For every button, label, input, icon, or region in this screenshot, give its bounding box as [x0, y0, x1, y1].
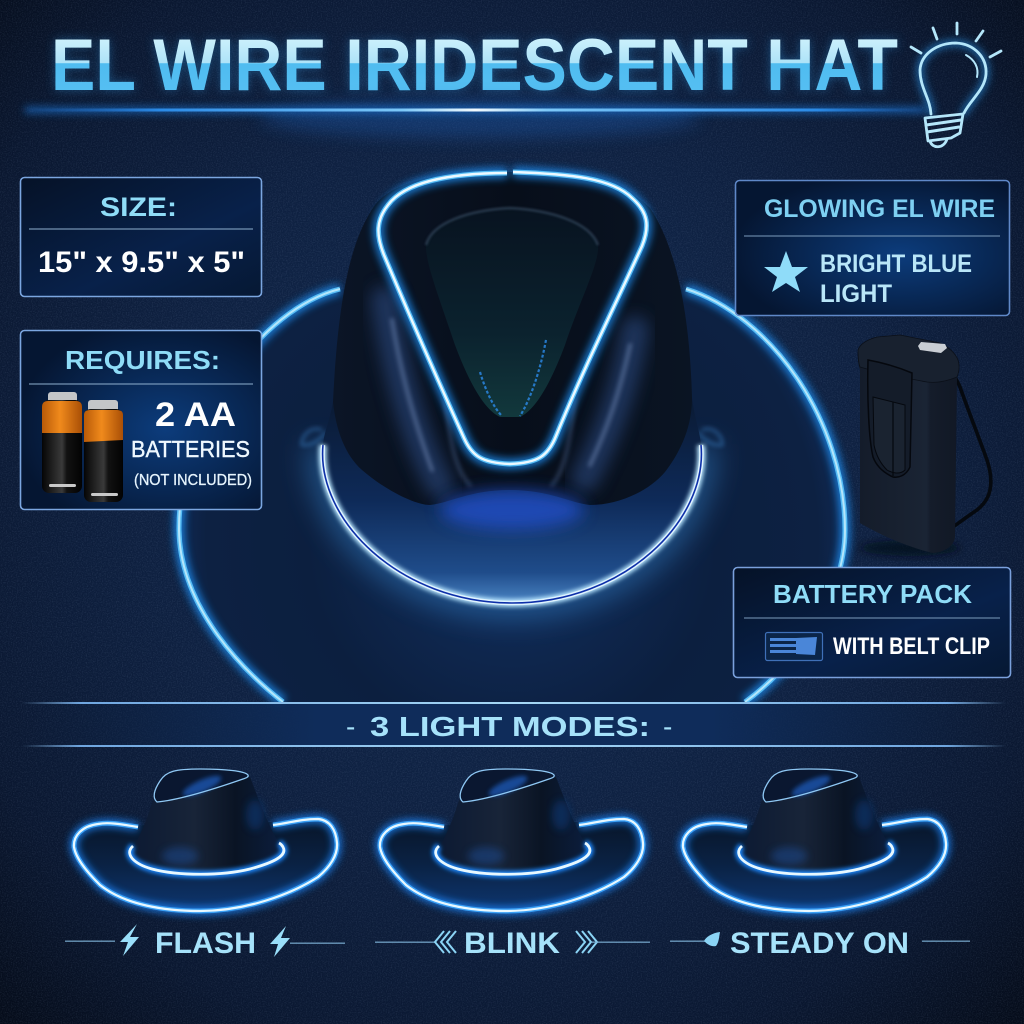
- light modes heading: -: [346, 711, 355, 742]
- label: steady on: [670, 927, 970, 960]
- title underline glow: [25, 98, 925, 138]
- hat band wire: [323, 445, 701, 603]
- hat crown: [333, 172, 692, 505]
- hat brim: [179, 289, 845, 702]
- light modes banner: [22, 702, 1006, 747]
- hat: steady on mode: [683, 769, 946, 911]
- light modes heading: -: [663, 711, 672, 742]
- size heading: SIZE:: [100, 192, 177, 222]
- icon: belt clip: [766, 632, 822, 660]
- battery pack device: [858, 335, 991, 556]
- hat crown dent: [426, 208, 598, 417]
- icon: leaf: [704, 932, 720, 946]
- hat crown wire: [378, 172, 647, 464]
- main hat: [179, 172, 845, 702]
- light modes heading: 3 LIGHT MODES:: [370, 711, 650, 742]
- light modes heading: [346, 711, 672, 742]
- icon: star: [764, 251, 808, 292]
- hat: blink mode: [380, 769, 643, 911]
- bright blue light text: LIGHT: [820, 280, 892, 308]
- pack belt clip: [868, 360, 912, 477]
- hat: flash mode: [74, 769, 337, 911]
- battery label: BATTERIES: [131, 436, 250, 462]
- title: EL WIRE IRIDESCENT HAT: [51, 25, 898, 106]
- icon: left chevrons: [435, 931, 456, 953]
- panel: requires: [20, 330, 262, 510]
- battery quantity: 2 AA: [155, 396, 236, 434]
- panel: battery pack: [734, 568, 1010, 678]
- pack body: [858, 335, 959, 553]
- battery pack heading: BATTERY PACK: [773, 579, 972, 609]
- title: EL WIRE IRIDESCENT HAT: [51, 25, 898, 106]
- pack cable: [947, 367, 991, 527]
- label: flash: FLASH: [155, 927, 256, 960]
- hat band glow: [323, 445, 701, 603]
- pack top: [858, 335, 959, 382]
- pack switch: [918, 342, 947, 353]
- hat lower band: [323, 398, 701, 603]
- not included note: (NOT INCLUDED): [134, 472, 252, 489]
- size value: 15" x 9.5" x 5": [38, 246, 245, 279]
- bright blue light text: BRIGHT BLUE: [820, 250, 972, 278]
- label: steady on: STEADY ON: [730, 927, 909, 960]
- requires heading: REQUIRES:: [65, 345, 220, 375]
- panel: size: [20, 178, 262, 296]
- glowing heading: GLOWING EL WIRE: [764, 195, 995, 223]
- hat brim loops: [302, 429, 722, 445]
- hat crown sheen: [385, 300, 635, 485]
- icon: battery right: [84, 400, 123, 502]
- icon: battery left: [42, 392, 82, 493]
- icon: light bulb: [911, 23, 1001, 147]
- panel: glowing el wire: [736, 180, 1010, 316]
- label: blink: [375, 927, 650, 960]
- hat iridescent blue reflection: [440, 490, 584, 530]
- label: flash: [65, 924, 345, 960]
- icon: right chevrons: [576, 931, 597, 953]
- icon: left bolt: [120, 924, 139, 956]
- icon: right bolt: [270, 926, 290, 957]
- with belt clip text: WITH BELT CLIP: [833, 633, 990, 660]
- bright blue light text: [820, 250, 972, 308]
- label: blink: BLINK: [464, 927, 560, 960]
